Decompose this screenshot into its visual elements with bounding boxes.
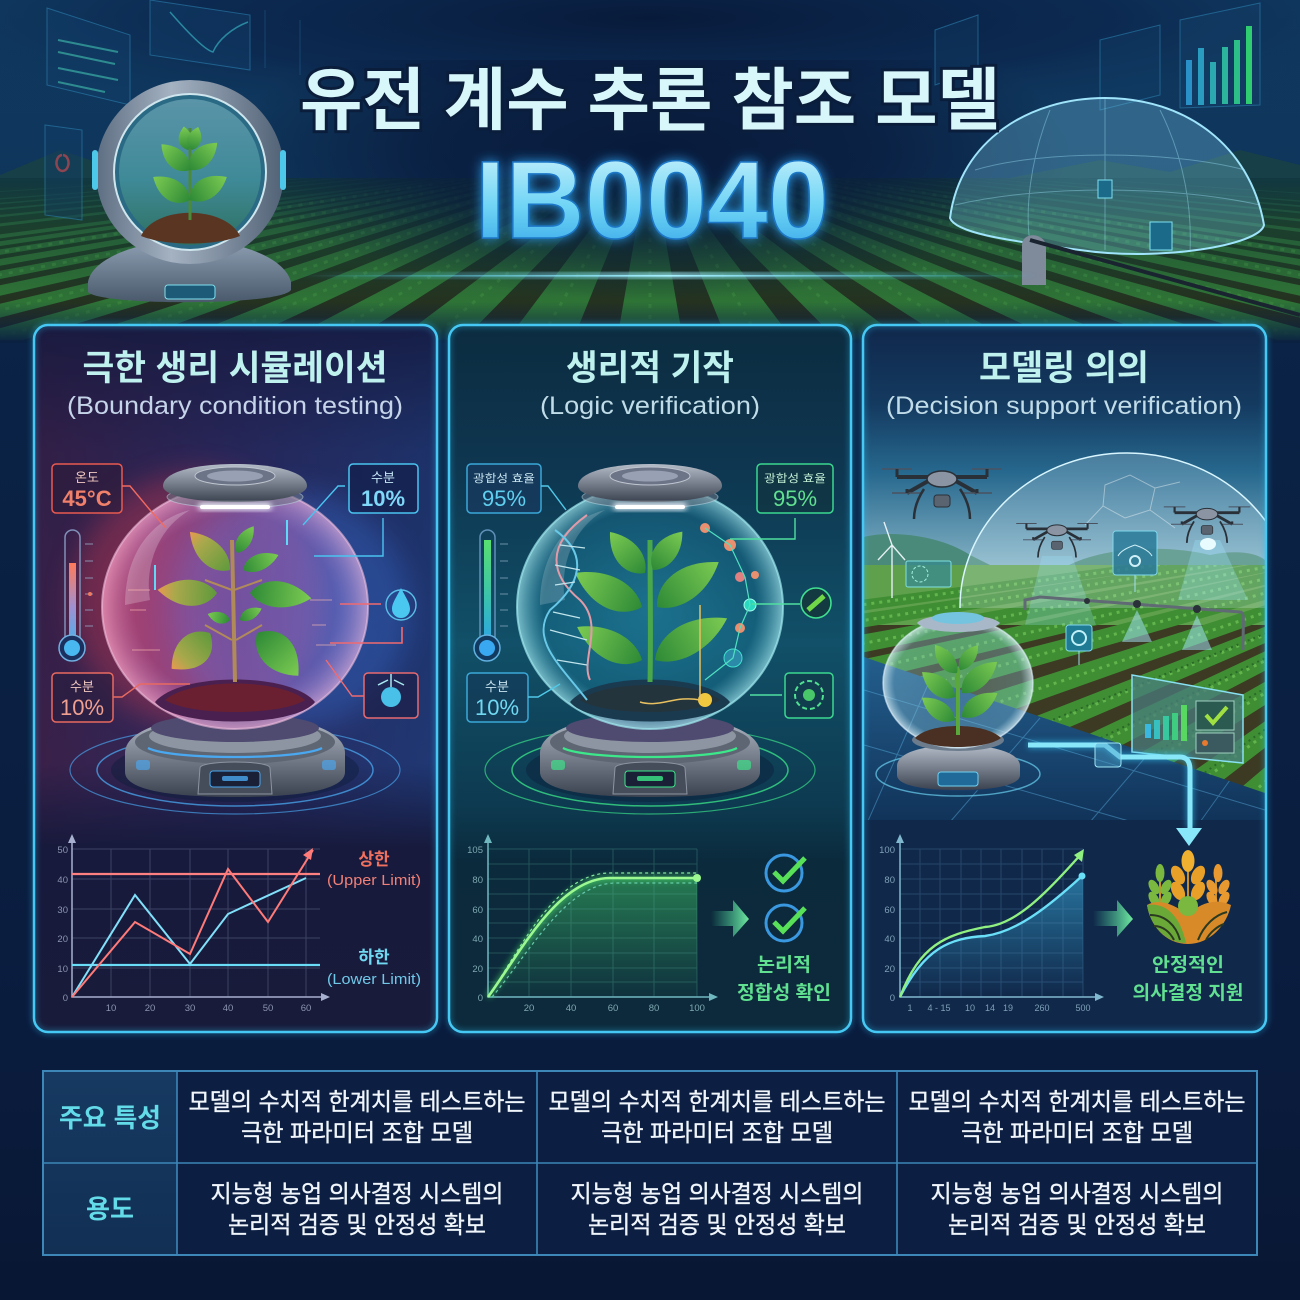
icon: drones <box>882 469 1250 625</box>
label: lower limit: (Lower Limit) <box>327 972 421 988</box>
line chart: boundary testing: 20 <box>145 1003 155 1014</box>
callout: moisture bottom: 10% <box>60 695 104 720</box>
cell: usage 1 <box>210 1181 504 1239</box>
icon: enzyme circle <box>752 588 831 618</box>
panel heading: extreme physiology <box>67 349 403 420</box>
line chart: decision support: 4 - 15 <box>927 1003 951 1013</box>
arrow: field to decision support <box>1028 743 1202 846</box>
callout: photosynthesis efficiency right: 광합성 효율 <box>764 472 826 485</box>
label: upper limit: (Upper Limit) <box>327 873 421 889</box>
icon: HUD bar chart top right <box>1186 26 1252 105</box>
cell: usage 2: 논리적 검증 및 안정성 확보 <box>588 1212 846 1239</box>
row label: key characteristics: 주요 특성 <box>59 1103 161 1133</box>
cell: characteristic 1: 모델의 수치적 한계치를 테스트하는 <box>188 1089 526 1116</box>
panel heading: extreme physiology: (Boundary condition testing) <box>67 392 403 420</box>
cell: characteristic 2: 극한 파라미터 조합 모델 <box>601 1120 833 1147</box>
icon: irrigation boom <box>1025 597 1243 650</box>
line chart: decision support: 14 <box>985 1003 995 1013</box>
label: logical consistency check: 정합성 확인 <box>737 982 831 1004</box>
label: stable decision support: 의사결정 지원 <box>1132 982 1244 1004</box>
cell: usage 3: 논리적 검증 및 안정성 확보 <box>948 1212 1206 1239</box>
callout: moisture: 10% <box>475 695 519 720</box>
cell: characteristic 3 <box>908 1089 1246 1147</box>
icon: wind turbine <box>878 522 905 598</box>
cell: characteristic 2: 모델의 수치적 한계치를 테스트하는 <box>548 1089 886 1116</box>
icon: sensor box <box>326 660 418 718</box>
model code IB0040: IB0040 <box>475 139 829 262</box>
cell: characteristic 2 <box>548 1089 886 1147</box>
line chart: boundary testing <box>57 834 330 1014</box>
line chart: boundary testing: 20 <box>57 934 68 945</box>
model code IB0040: IB0040 <box>475 139 829 262</box>
line chart: decision support: 40 <box>884 934 895 945</box>
line chart: decision support: 60 <box>884 905 895 916</box>
icon: thermometer red <box>59 530 93 661</box>
line chart: logic verification <box>467 834 718 1014</box>
line chart: logic verification: 100 <box>689 1003 705 1014</box>
line chart: boundary testing: 10 <box>57 964 68 975</box>
arrow: to stable decision <box>1093 900 1133 937</box>
line chart: logic verification: 105 <box>467 845 483 856</box>
callout: moisture bottom: 수분 <box>70 679 94 694</box>
line chart: logic verification: 80 <box>472 875 483 886</box>
glowing divider line <box>300 273 1040 278</box>
HUD ghost panels background <box>45 0 1260 220</box>
icon: cell box <box>750 673 833 718</box>
label: logical consistency check <box>737 954 831 1004</box>
row label: usage: 용도 <box>86 1194 134 1224</box>
illustration: stressed plant globe <box>70 464 410 814</box>
icon: hero field dome <box>950 98 1300 315</box>
callout: moisture top: 10% <box>361 486 405 511</box>
line chart: logic verification: 40 <box>566 1003 576 1014</box>
line chart: logic verification: 60 <box>608 1003 618 1014</box>
callout: moisture <box>467 673 560 722</box>
cell: usage 2: 지능형 농업 의사결정 시스템의 <box>570 1181 864 1208</box>
line chart: decision support: 260 <box>1034 1003 1050 1013</box>
line chart: logic verification: 60 <box>472 905 483 916</box>
line chart: boundary testing: 40 <box>57 875 68 886</box>
icon: DNA helix <box>543 515 592 700</box>
line chart: boundary testing: 40 <box>223 1003 233 1014</box>
line chart: boundary testing: 50 <box>57 845 68 856</box>
label: lower limit: 하한 <box>358 948 390 967</box>
cell: characteristic 1 <box>188 1089 526 1147</box>
callout: moisture: 수분 <box>485 679 509 694</box>
icon: glass dome <box>959 452 1265 608</box>
line chart: logic verification: 20 <box>524 1003 534 1014</box>
icon: check marks <box>766 855 805 941</box>
cell: characteristic 3: 모델의 수치적 한계치를 테스트하는 <box>908 1089 1246 1116</box>
icon: holographic card <box>906 561 951 587</box>
line chart: decision support: 100 <box>879 845 895 856</box>
illustration: smart farm scene <box>864 452 1265 820</box>
illustration: small plant globe <box>876 612 1040 796</box>
label: stable decision support <box>1132 954 1244 1004</box>
label: upper limit: 상한 <box>358 850 390 869</box>
callout: moisture top <box>303 464 418 556</box>
icon: thermometer green <box>474 530 508 661</box>
line chart: decision support: 500 <box>1075 1003 1091 1013</box>
label: logical consistency check: 논리적 <box>757 954 811 976</box>
line chart: boundary testing: 30 <box>57 905 68 916</box>
line chart: boundary testing: 50 <box>263 1003 273 1014</box>
panel: extreme physiology simulation <box>34 325 437 1032</box>
line chart: boundary testing: 30 <box>185 1003 195 1014</box>
panel heading: modeling significance: 모델링 의의 <box>979 349 1149 388</box>
callout: photosynthesis efficiency left: 95% <box>482 486 526 511</box>
callout: photosynthesis efficiency right: 95% <box>773 486 817 511</box>
icon: floating signs <box>1066 531 1157 665</box>
header scene: farm fields <box>0 0 1300 360</box>
line chart: logic verification: 40 <box>472 934 483 945</box>
callout: temperature: 45°C <box>62 486 112 511</box>
cell: usage 2 <box>570 1181 864 1239</box>
callout: moisture bottom <box>52 673 190 722</box>
line chart: boundary testing: 0 <box>63 993 68 1004</box>
label: lower limit <box>327 948 421 988</box>
cell: usage 3: 지능형 농업 의사결정 시스템의 <box>930 1181 1224 1208</box>
title: 유전 계수 추론 참조 모델 <box>300 63 1000 139</box>
line chart: boundary testing: 10 <box>106 1003 116 1014</box>
line chart: logic verification: 0 <box>478 993 483 1004</box>
line chart: decision support: 80 <box>884 875 895 886</box>
comparison table <box>43 1071 1257 1255</box>
panel: physiological mechanism <box>449 325 851 1032</box>
title: 유전 계수 추론 참조 모델 <box>300 63 1000 139</box>
line chart: logic verification: 80 <box>649 1003 659 1014</box>
panel heading: mechanism: 생리적 기작 <box>566 349 734 388</box>
line chart: decision support: 19 <box>1003 1003 1013 1013</box>
illustration: healthy plant globe <box>485 464 815 814</box>
cell: usage 1: 지능형 농업 의사결정 시스템의 <box>210 1181 504 1208</box>
icon: dashboard screen <box>1132 675 1243 763</box>
line chart: boundary testing: 60 <box>301 1003 311 1014</box>
cell: characteristic 3: 극한 파라미터 조합 모델 <box>961 1120 1193 1147</box>
label: stable decision support: 안정적인 <box>1152 954 1224 976</box>
panel: modeling significance <box>858 320 1272 1038</box>
label: upper limit <box>327 850 421 889</box>
panel heading: mechanism <box>540 349 760 420</box>
line chart: decision support: 0 <box>890 993 895 1004</box>
cell: usage 1: 논리적 검증 및 안정성 확보 <box>228 1212 486 1239</box>
panel heading: mechanism: (Logic verification) <box>540 392 760 420</box>
line chart: logic verification: 20 <box>472 964 483 975</box>
arrow: to verification <box>711 900 749 937</box>
panel heading: extreme physiology: 극한 생리 시뮬레이션 <box>82 349 388 388</box>
cell: usage 3 <box>930 1181 1224 1239</box>
callout: photosynthesis efficiency right <box>730 464 833 539</box>
line chart: decision support: 1 <box>907 1003 913 1013</box>
callout: temperature <box>52 464 166 528</box>
panel heading: modeling significance: (Decision support verification) <box>886 392 1242 420</box>
callout: photosynthesis efficiency left: 광합성 효율 <box>473 472 535 485</box>
line chart: decision support: 10 <box>965 1003 975 1013</box>
panel heading: modeling significance <box>886 349 1242 420</box>
line chart: decision support: 20 <box>884 964 895 975</box>
callout: temperature: 온도 <box>75 470 99 485</box>
line chart: decision support <box>879 834 1104 1013</box>
icon: hero specimen capsule <box>88 80 291 302</box>
icon: water drop <box>330 588 416 643</box>
cell: characteristic 1: 극한 파라미터 조합 모델 <box>241 1120 473 1147</box>
icon: wheat and fields emblem <box>1146 850 1232 944</box>
callout: moisture top: 수분 <box>371 470 395 485</box>
callout: photosynthesis efficiency left <box>467 464 566 513</box>
